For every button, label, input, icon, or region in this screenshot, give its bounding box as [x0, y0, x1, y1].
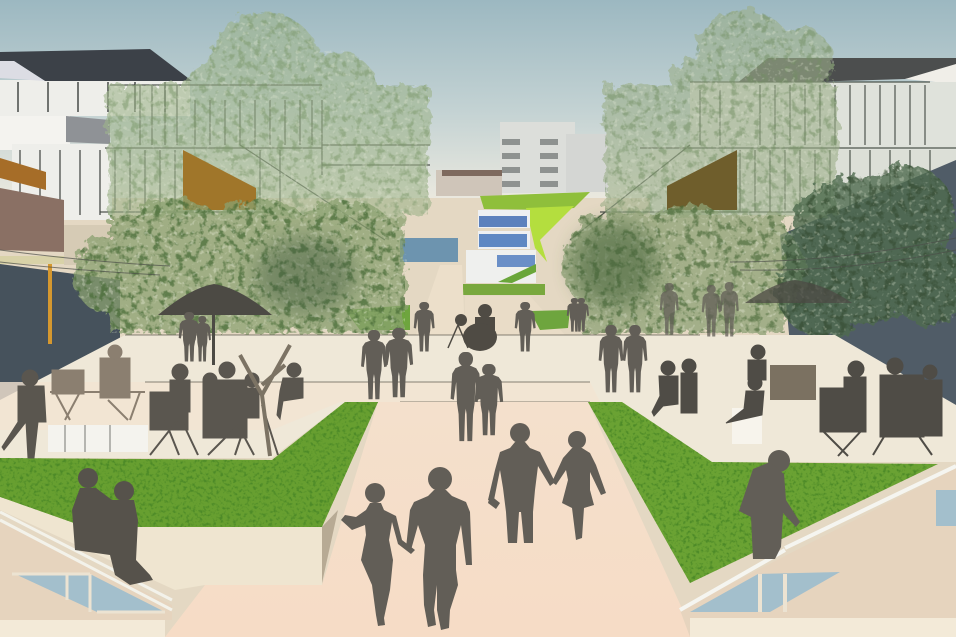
- mid left tree canopy: [72, 198, 407, 333]
- lower right roof with skylight: [680, 466, 956, 637]
- seated and standing diners right: [652, 345, 942, 456]
- couple foreground holding hands: [341, 467, 472, 630]
- ground plaza: [0, 198, 956, 637]
- couple lower left: [72, 468, 153, 585]
- tree trunks: [240, 345, 290, 456]
- right buildings: [650, 58, 956, 408]
- band on stage: [448, 304, 497, 351]
- faded diners left: [50, 345, 145, 420]
- right lawn: [588, 402, 938, 583]
- string lights: [0, 238, 956, 275]
- sky: [0, 0, 956, 200]
- walkers on plaza: [179, 282, 739, 441]
- couple midground holding hands: [488, 423, 606, 543]
- dark right tree canopy: [777, 165, 956, 338]
- upper right tree canopy: [602, 10, 837, 215]
- upper left tree canopy: [108, 12, 431, 215]
- plaza bands: [0, 335, 956, 462]
- seated diners left: [2, 362, 303, 458]
- building railings: [100, 82, 956, 240]
- mid right tree canopy: [563, 205, 805, 333]
- wood panels: [183, 150, 737, 210]
- lower left planter wall: [0, 497, 338, 590]
- left lawn: [0, 402, 378, 527]
- white planter blocks: [48, 425, 148, 452]
- lower left roof with skylight: [0, 512, 172, 637]
- pedestrians: [72, 282, 800, 630]
- café umbrellas: [158, 280, 852, 365]
- central walkway: [165, 402, 695, 637]
- mid-ground towers and terraces: [345, 122, 608, 335]
- man lower right: [739, 450, 800, 559]
- left buildings: [0, 49, 192, 408]
